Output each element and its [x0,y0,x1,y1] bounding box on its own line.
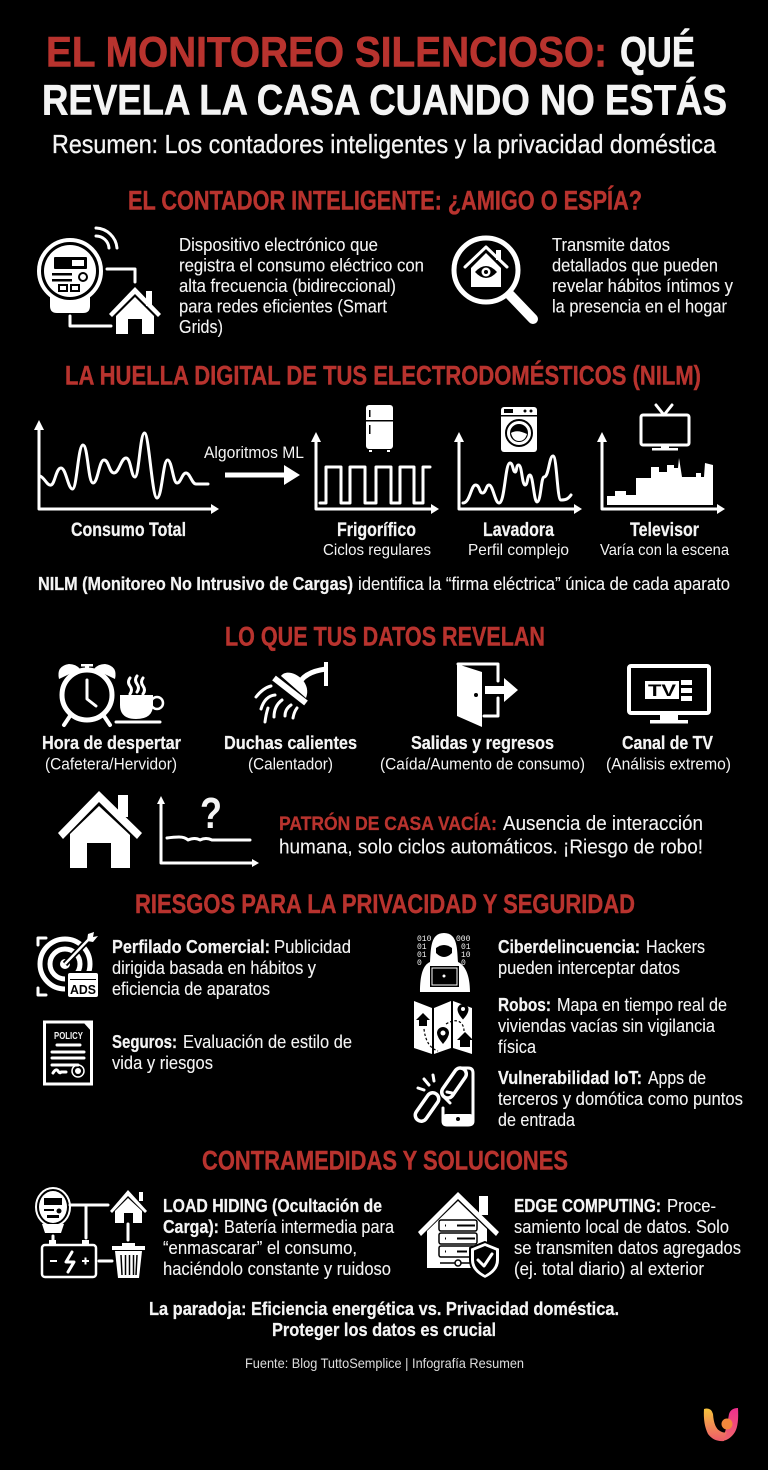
icon: TV channel [629,666,709,724]
icon: ad target: ADS [70,982,96,997]
icon: hacker: 000 [456,935,471,944]
icon: load hiding diagram [36,1188,147,1278]
chart: lavadora [454,432,582,514]
text: ciberdelincuencia: pueden interceptar datos [498,958,680,978]
icon: logo [704,1408,738,1441]
icon: magnifier with house and eye [454,238,533,319]
callout: empty house pattern [279,811,703,858]
label: canal de tv: (Análisis extremo) [606,754,731,774]
icon: hacker: 01 [417,951,427,960]
icon: television [641,405,689,450]
label: canal de tv [606,733,731,774]
icon: hacker: 01 [461,943,471,952]
label: hora de despertar: Hora de despertar [42,733,181,753]
text: load hiding: haciéndolo constante y ruidoso [163,1259,391,1279]
callout: empty house pattern: PATRÓN DE CASA VACÍA: [279,811,497,835]
text: ciberdelincuencia: Ciberdelincuencia: [498,937,640,957]
title [42,28,727,124]
label: consumo total: Consumo Total [71,520,186,541]
text: data transmission [552,235,733,316]
label: hora de despertar: (Cafetera/Hervidor) [45,754,177,774]
label: frigorifico [323,520,431,559]
label: hora de despertar [42,733,181,774]
arrow: algoritmos ML: Algoritmos ML [204,443,304,462]
text: edge computing: samiento local de datos. Solo [514,1217,729,1237]
icon: hacker: 0 [417,959,422,968]
label: televisor: Televisor [630,520,700,541]
icon: hacker [417,933,471,992]
text: device description: Dispositivo electrónico que [179,235,378,255]
text: device description: para redes eficientes (Smart [179,296,387,316]
text: robos: Mapa en tiempo real de [557,995,727,1015]
text: vulnerabilidad IoT [498,1068,743,1130]
icon: edge computing house [418,1192,500,1279]
text: edge computing: Proce- [667,1196,716,1216]
heading: lo que tus datos revelan: LO QUE TUS DATOS REVELAN [225,622,545,652]
text: robos: Robos: [498,995,551,1015]
icon: hacker: 010 [417,935,432,944]
icon: hacker: 10 [461,951,471,960]
source: Fuente: Blog TuttoSemplice | Infografía Resumen [245,1355,524,1371]
text: vulnerabilidad IoT: de entrada [498,1110,576,1130]
text: edge computing: se transmiten datos agregados [514,1238,741,1258]
text: NILM explanation [38,574,730,594]
text: vulnerabilidad IoT: Vulnerabilidad IoT: [498,1068,642,1088]
text: data transmission: la presencia en el hogar [552,296,727,316]
icon: broken link and phone [413,1066,473,1125]
icon: alarm clock and coffee [58,664,163,725]
text: load hiding: “enmascarar” el consumo, [163,1238,357,1258]
icon: insurance policy: POLICY [54,1031,83,1042]
icon: empty house [58,791,142,868]
heading: contramedidas: CONTRAMEDIDAS Y SOLUCIONES [202,1146,568,1176]
icon: insurance policy [44,1022,92,1084]
icon: hacker: 01 [417,943,427,952]
callout: empty house pattern: Ausencia de interacción [503,813,703,835]
icon: exit door [457,664,518,727]
text: load hiding [163,1196,395,1279]
chart: frigorifico [311,432,439,514]
chart: consumo total [34,420,219,514]
icon: fridge [366,405,393,452]
text: device description: Grids) [179,317,223,337]
label: salidas y regresos: Salidas y regresos [411,733,554,753]
text: robos: viviendas vacías sin vigilancia [498,1016,716,1036]
text: perfilado comercial: dirigida basada en hábitos y [112,958,316,978]
label: lavadora [468,520,569,559]
conclusion: La paradoja: Eficiencia energética vs. Privacidad doméstica. [149,1299,619,1319]
label: duchas calientes: (Calentador) [248,754,333,774]
icon: map with pins [414,1001,473,1054]
callout: empty house pattern: humana, solo ciclos automáticos. ¡Riesgo de robo! [279,836,703,858]
label: lavadora: Perfil complejo [468,542,569,559]
label: duchas calientes [224,733,357,774]
text: NILM explanation: NILM (Monitoreo No Intrusivo de Cargas) [38,574,353,594]
chart: televisor [597,432,725,514]
label: salidas y regresos [380,733,585,774]
text: load hiding: Carga): [163,1217,219,1237]
text: seguros: Seguros: [112,1032,177,1052]
icon: hacker: 0 [461,959,466,968]
text: NILM explanation: identifica la “firma eléctrica” única de cada aparato [358,574,730,594]
text: seguros [112,1032,352,1073]
label: salidas y regresos: (Caída/Aumento de consumo) [380,754,585,774]
text: load hiding: LOAD HIDING (Ocultación de [163,1196,382,1216]
conclusion: Proteger los datos es crucial [272,1320,496,1340]
conclusion [149,1299,619,1340]
icon: shower [256,662,328,722]
label: televisor: Varía con la escena [600,542,729,559]
chart: flat consumption: ? [200,789,222,838]
text: perfilado comercial [112,937,351,999]
text: device description: registra el consumo eléctrico con [179,256,424,276]
text: edge computing: EDGE COMPUTING: [514,1196,661,1216]
label: frigorifico: Ciclos regulares [323,542,431,559]
heading: riesgos: RIESGOS PARA LA PRIVACIDAD Y SEGURIDAD [135,889,635,919]
title: QUÉ [620,28,695,76]
text: perfilado comercial: Publicidad [274,937,351,957]
text: edge computing: (ej. total diario) al exterior [514,1259,704,1279]
label: televisor [600,520,729,559]
text: vulnerabilidad IoT: Apps de [648,1068,706,1088]
text: data transmission: Transmite datos [552,235,670,255]
text: data transmission: revelar hábitos íntimos y [552,276,733,296]
label: canal de tv: Canal de TV [622,733,713,753]
text: ciberdelincuencia [498,937,705,978]
heading: el contador inteligente: EL CONTADOR INTELIGENTE: ¿AMIGO O ESPÍA? [128,184,642,216]
text: seguros: vida y riesgos [112,1053,213,1073]
icon: ad target [38,932,101,999]
icon: washing machine [501,407,537,452]
icon: smart meter and house [39,228,161,334]
text: data transmission: detallados que pueden [552,256,718,276]
label: duchas calientes: Duchas calientes [224,733,357,753]
label: lavadora: Lavadora [483,520,554,541]
arrow: algoritmos ML [204,443,304,485]
label: frigorifico: Frigorífico [337,520,416,541]
text: ciberdelincuencia: Hackers [646,937,705,957]
text: edge computing [514,1196,741,1279]
text: perfilado comercial: Perfilado Comercial: [112,937,270,957]
text: device description [179,235,424,337]
text: perfilado comercial: eficiencia de aparatos [112,979,270,999]
text: device description: alta frecuencia (bidireccional) [179,276,396,296]
text: vulnerabilidad IoT: terceros y domótica como puntos [498,1089,743,1109]
text: robos [498,995,727,1057]
title: EL MONITOREO SILENCIOSO: [46,28,607,76]
text: load hiding: Batería intermedia para [224,1217,395,1237]
text: robos: física [498,1037,537,1057]
icon: TV channel: TV [648,681,677,700]
text: seguros: Evaluación de estilo de [183,1032,352,1052]
chart: flat consumption [157,789,259,867]
